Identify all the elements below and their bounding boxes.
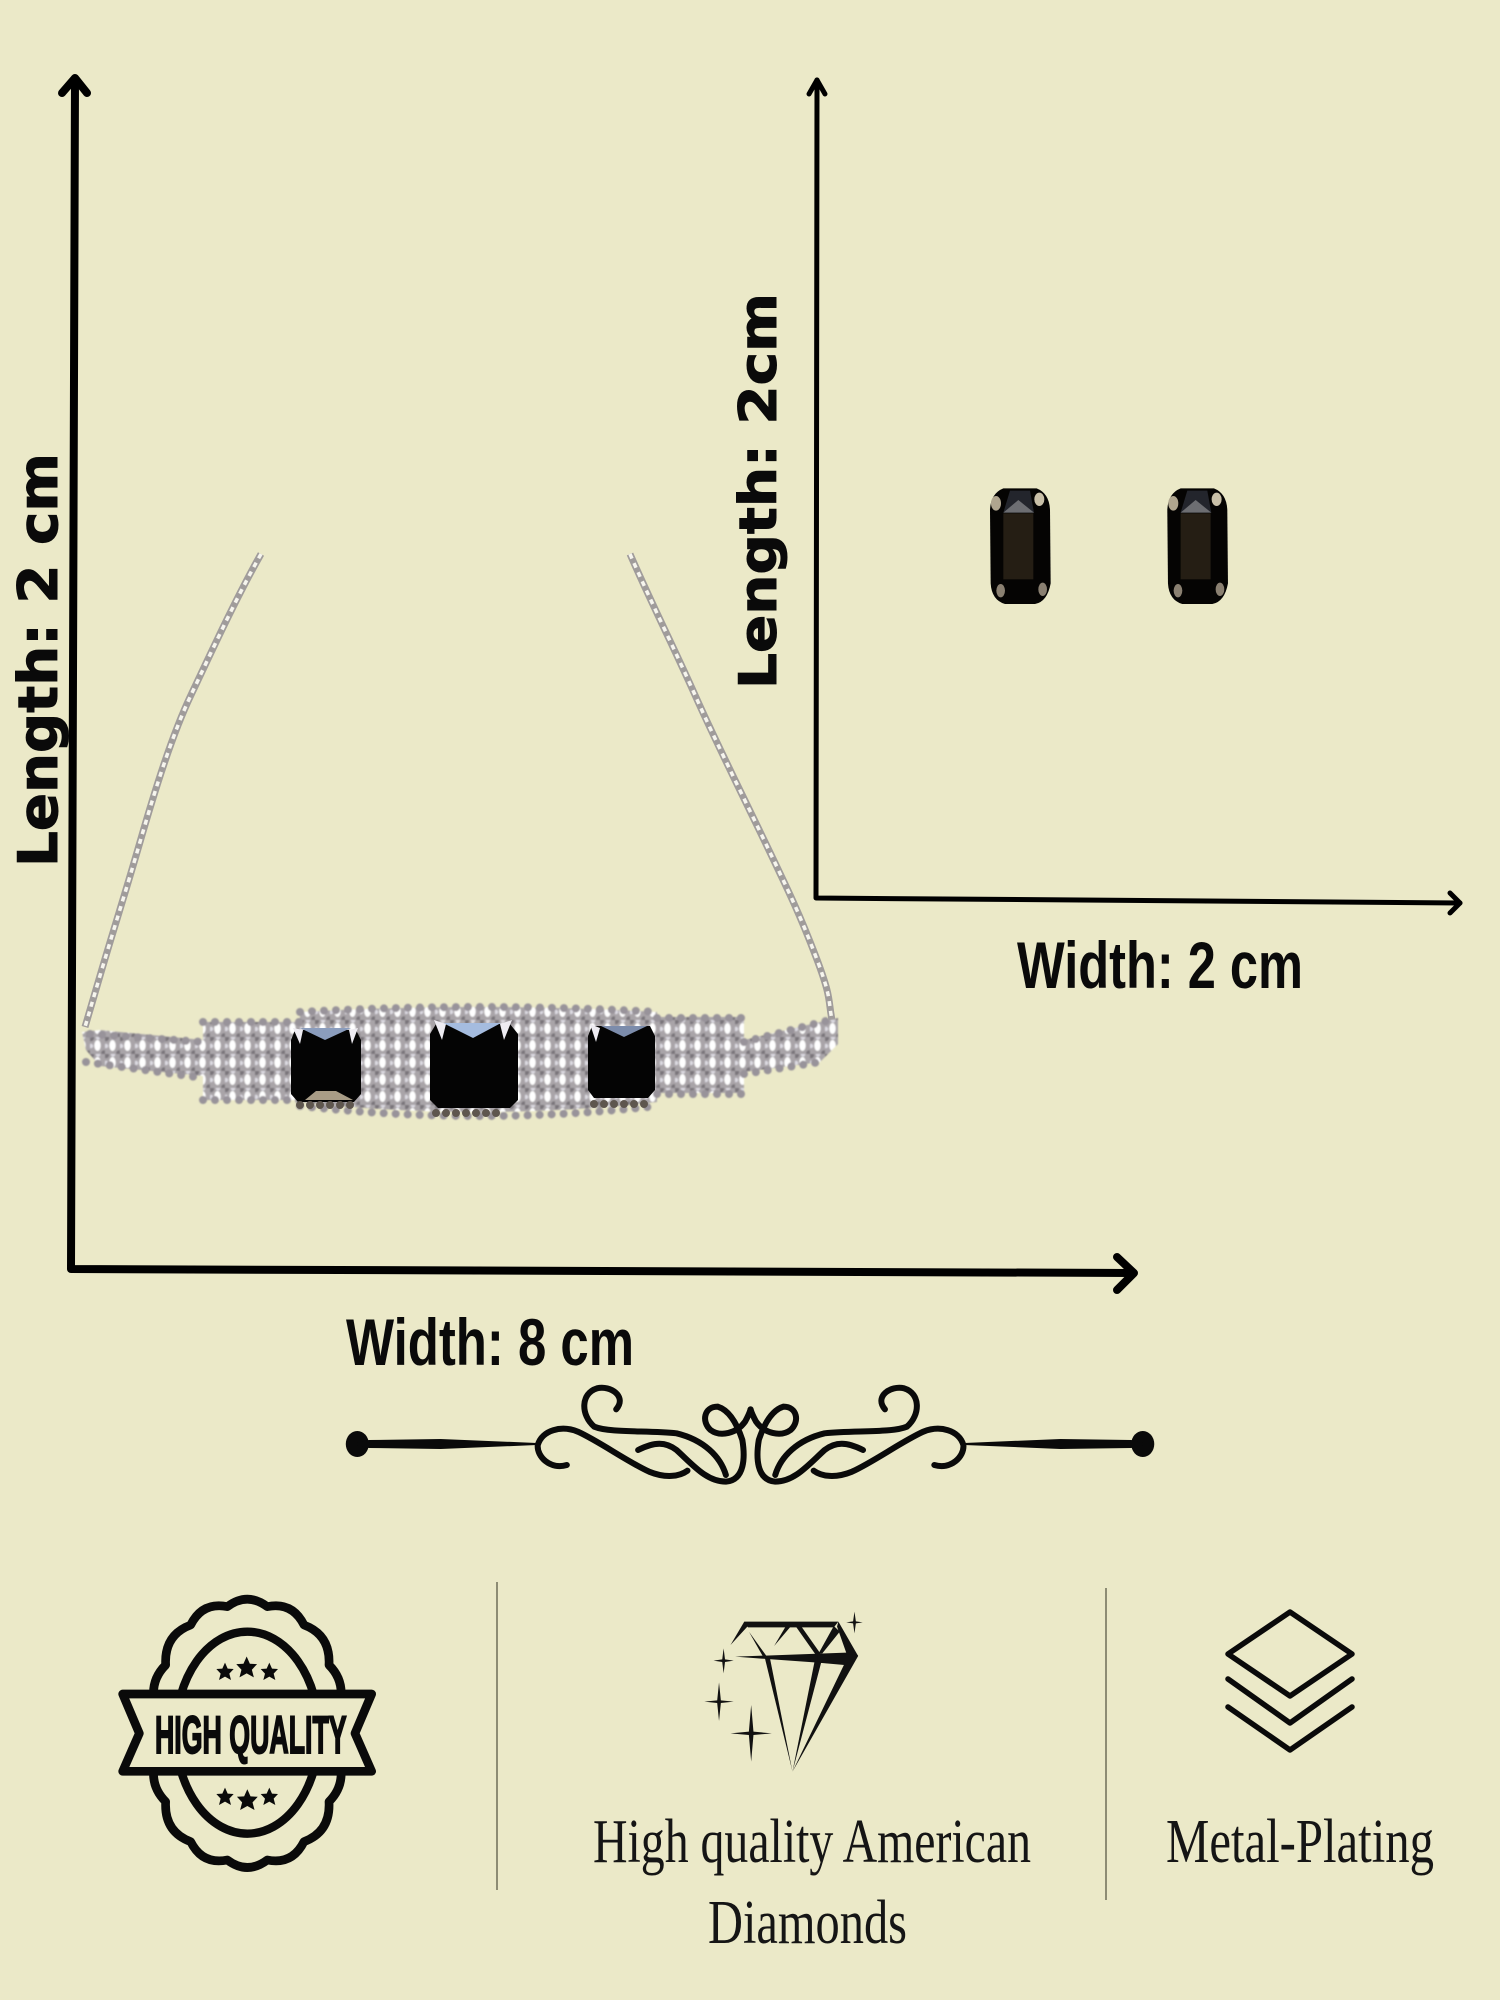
left chain — [85, 554, 261, 1027]
left earring — [990, 488, 1051, 604]
feature text: high quality American Diamonds: Diamonds — [708, 1889, 907, 1957]
divider — [496, 1582, 498, 1890]
icon: high quality badge — [123, 1599, 372, 1867]
right chain — [630, 554, 832, 1020]
earring dimension axes — [809, 80, 1460, 913]
label: necklace width: Width: 8 cm — [346, 1305, 634, 1379]
necklace — [82, 554, 838, 1116]
right stone — [588, 1024, 655, 1098]
right earring — [1167, 488, 1228, 604]
centre stone — [430, 1020, 518, 1108]
badge text: HIGH QUALITY — [155, 1706, 347, 1765]
feature text: metal plating: Metal-Plating — [1166, 1808, 1434, 1876]
bottom stars — [216, 1788, 278, 1810]
icon: diamond with sparkles — [704, 1612, 863, 1772]
top stars — [216, 1657, 278, 1680]
left stone — [291, 1028, 361, 1102]
icon: stacked layers — [1228, 1612, 1352, 1750]
stone base settings — [300, 1104, 650, 1113]
label: earring width: Width: 2 cm — [1017, 928, 1303, 1002]
label: necklace length: Length: 2 cm — [7, 453, 70, 867]
divider — [1105, 1588, 1107, 1900]
ribbon — [123, 1694, 372, 1771]
ornamental divider — [346, 1388, 1154, 1482]
necklace dimension axes — [62, 78, 1134, 1290]
label: earring length: Length: 2cm — [729, 293, 789, 689]
rhinestone band — [82, 1007, 838, 1116]
scalloped seal outline — [152, 1599, 343, 1867]
feature text: high quality American Diamonds — [593, 1808, 1031, 1957]
feature text: high quality American Diamonds: High quality American — [593, 1808, 1031, 1876]
inner oval — [176, 1632, 319, 1834]
